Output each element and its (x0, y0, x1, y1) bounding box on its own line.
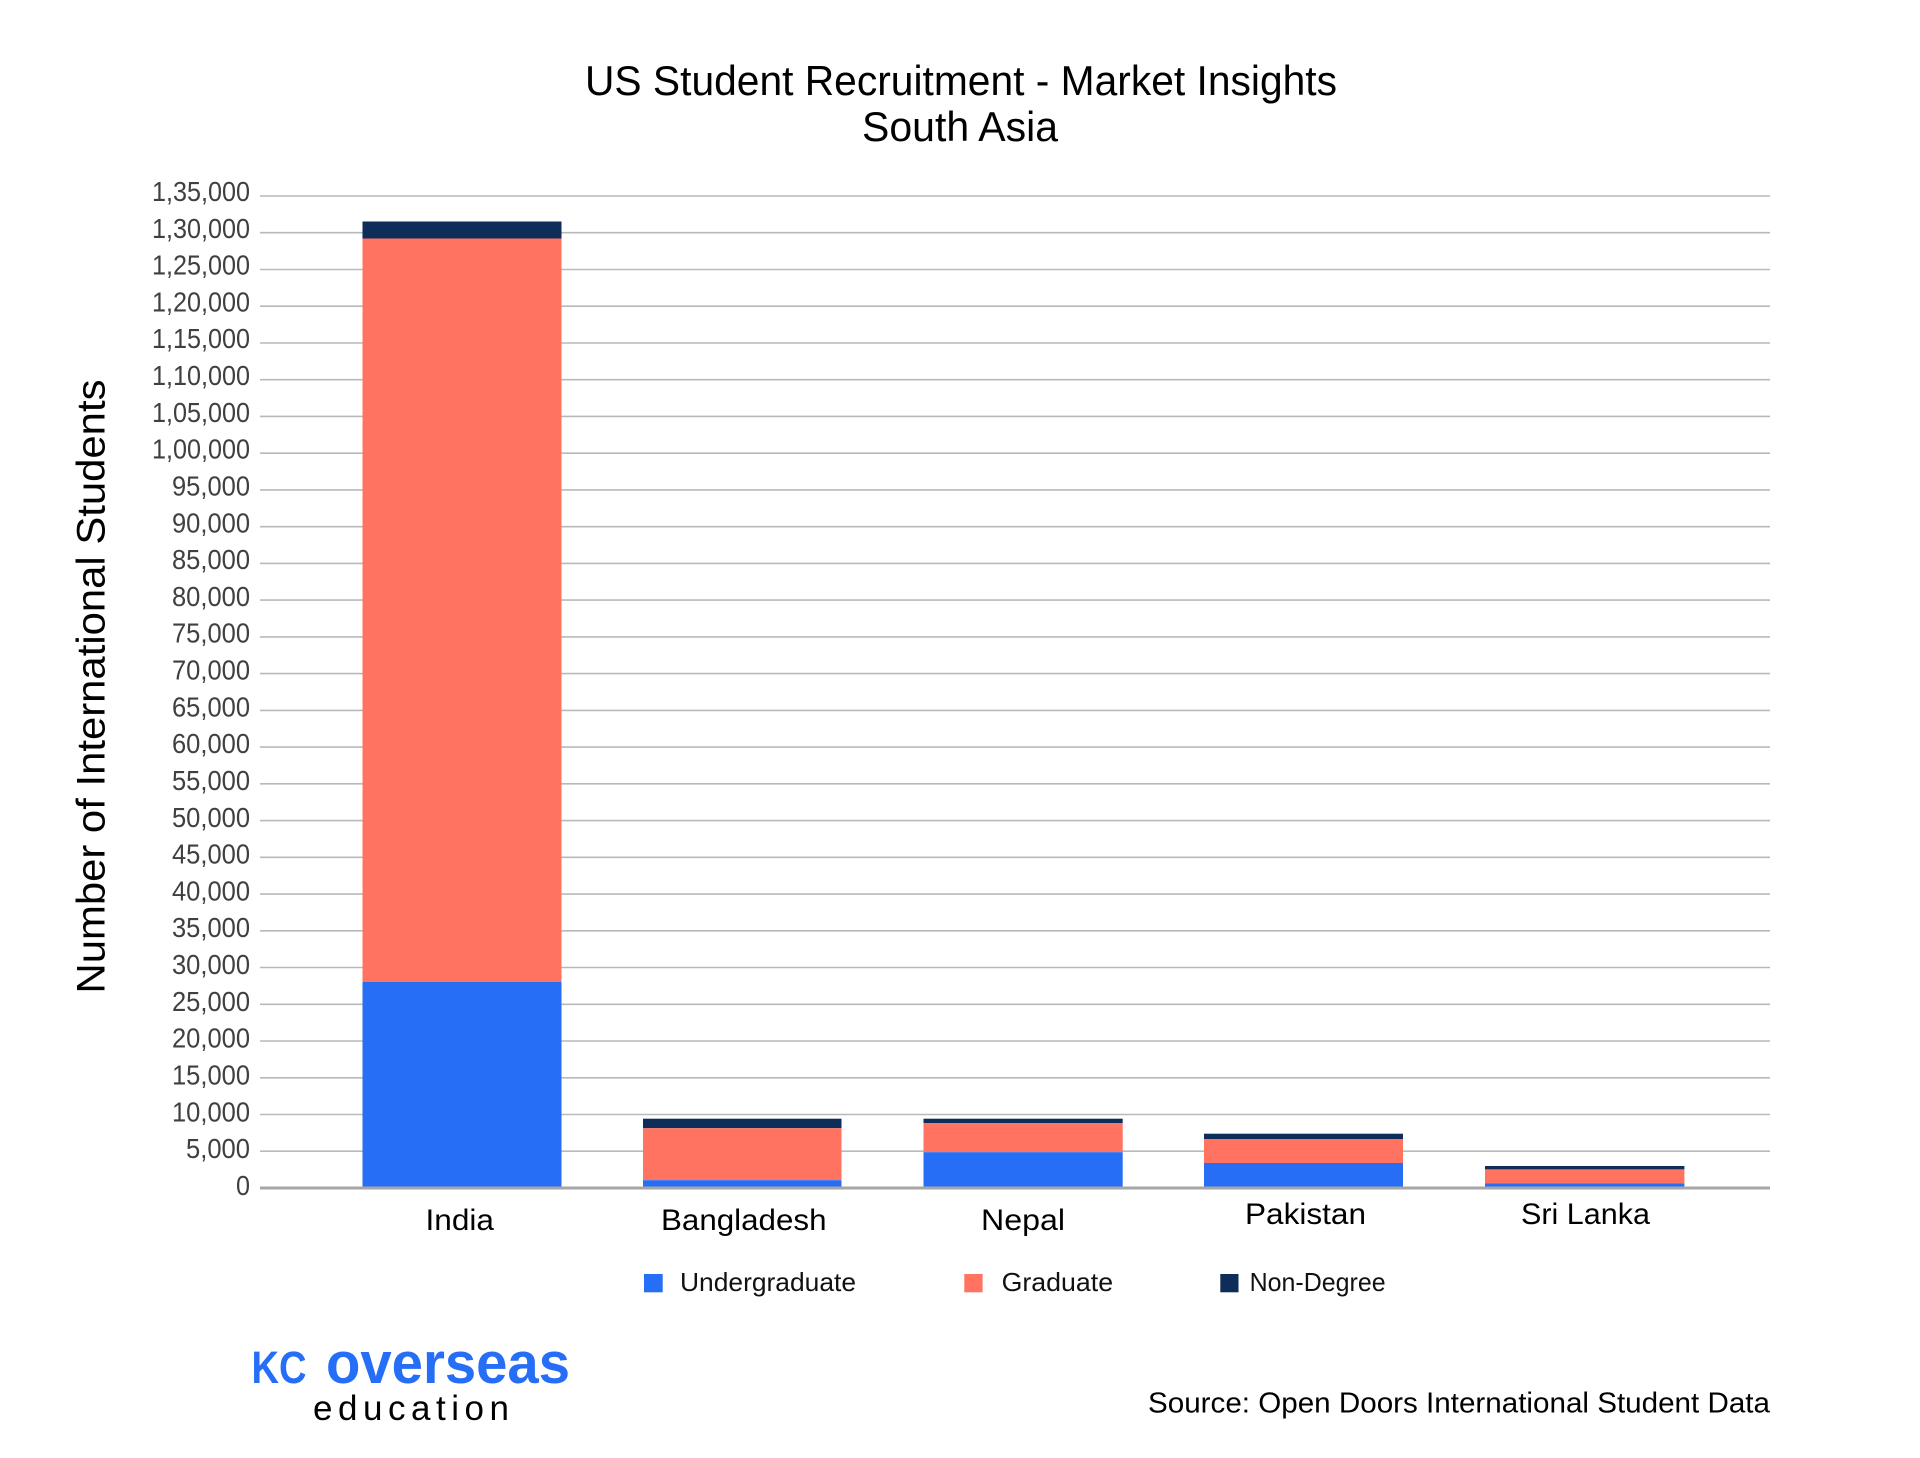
y axis labels: 1,05,000 (152, 397, 250, 428)
category labels: Bangladesh (661, 1204, 826, 1237)
y axis labels: 45,000 (172, 839, 250, 870)
y axis labels: 90,000 (172, 507, 250, 538)
y axis labels: 1,15,000 (152, 323, 250, 354)
bar: Pakistan (1204, 1134, 1403, 1186)
logo: KC overseas education: KC (252, 1342, 306, 1393)
y axis labels: 1,20,000 (152, 286, 250, 317)
y axis labels: 85,000 (172, 544, 250, 575)
source note: Source: Open Doors International Student Data (1148, 1388, 1771, 1420)
y axis labels: 35,000 (172, 912, 250, 943)
category labels: Nepal (981, 1204, 1065, 1237)
category labels: Sri Lanka (1521, 1198, 1650, 1231)
title (585, 57, 1337, 150)
legend: non-degree: Non-Degree (1250, 1267, 1386, 1297)
y axis labels: 75,000 (172, 618, 250, 649)
y axis labels: 0 (236, 1170, 250, 1201)
y axis labels: 80,000 (172, 581, 250, 612)
y axis labels: 40,000 (172, 875, 250, 906)
y axis labels: 50,000 (172, 802, 250, 833)
category labels: India (426, 1204, 494, 1237)
y axis labels: 65,000 (172, 691, 250, 722)
logo: KC overseas education: overseas (326, 1331, 570, 1396)
legend: undergraduate: Undergraduate (680, 1267, 856, 1297)
title: South Asia (862, 103, 1059, 150)
y axis labels: 20,000 (172, 1023, 250, 1054)
y axis labels: 30,000 (172, 949, 250, 980)
x axis line (260, 1186, 1770, 1190)
category labels: Pakistan (1245, 1198, 1366, 1231)
bar: Sri Lanka (1485, 1166, 1684, 1186)
y axis labels: 15,000 (172, 1059, 250, 1090)
y axis labels: 10,000 (172, 1096, 250, 1127)
y axis labels: 1,25,000 (152, 250, 250, 281)
y axis labels: 1,00,000 (152, 434, 250, 465)
y axis title: Number of International Students (70, 380, 114, 994)
y axis labels: 1,10,000 (152, 360, 250, 391)
y axis labels: 1,35,000 (152, 176, 250, 207)
y axis labels: 1,30,000 (152, 213, 250, 244)
y axis labels: 5,000 (186, 1133, 250, 1164)
legend: graduate: Graduate (1002, 1267, 1113, 1297)
y axis labels: 60,000 (172, 728, 250, 759)
y axis labels (152, 176, 250, 1201)
y axis labels: 55,000 (172, 765, 250, 796)
category labels (426, 1198, 1650, 1237)
y axis labels: 70,000 (172, 654, 250, 686)
bar: Nepal (924, 1119, 1123, 1186)
bar: India (362, 222, 562, 1186)
logo: KC overseas education: education (313, 1389, 509, 1428)
bars (362, 222, 1684, 1186)
legend (644, 1267, 1386, 1297)
y axis labels: 25,000 (172, 986, 250, 1017)
title: US Student Recruitment - Market Insights (585, 57, 1337, 104)
bar: Bangladesh (643, 1119, 842, 1186)
logo: KC overseas education (252, 1331, 570, 1428)
y axis labels: 95,000 (172, 470, 250, 502)
